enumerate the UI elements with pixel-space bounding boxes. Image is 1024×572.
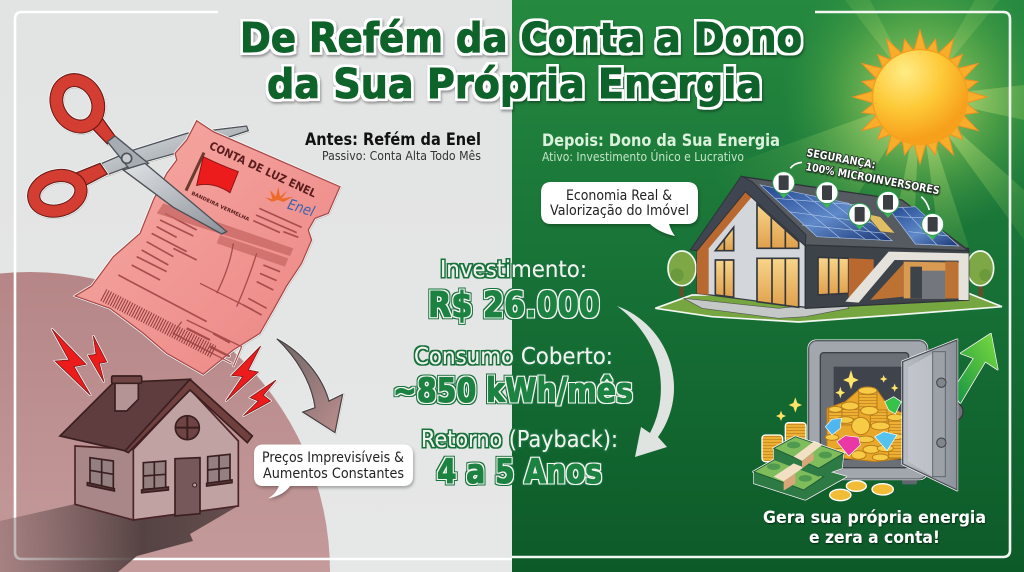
house front wall <box>133 389 238 520</box>
bill text lines <box>118 208 302 322</box>
gable wood panel <box>697 192 752 295</box>
icon: red lightning bolts <box>52 329 276 416</box>
small pointer arrows <box>790 162 929 210</box>
safe interior <box>820 353 909 468</box>
front roof trim <box>690 176 806 251</box>
bill flag caption: BANDEIRA VERMELHA <box>190 191 250 223</box>
Enel logo <box>265 187 317 221</box>
closing statement: Gera sua própria energia <box>763 508 986 528</box>
right tree <box>967 251 994 297</box>
white diagonal entrance frame <box>845 252 969 303</box>
right frame outline <box>512 12 1010 557</box>
maroon semicircle behind the house <box>0 272 330 572</box>
stat: investimento: Investimento: <box>440 257 587 283</box>
callout: economia real <box>541 182 698 236</box>
icon: scissors cutting the bill <box>30 73 340 374</box>
house side wall <box>75 446 133 520</box>
solar panels left <box>760 185 892 241</box>
bill table header bands <box>157 203 293 256</box>
solar panels right <box>889 207 959 246</box>
metal roof <box>742 177 969 251</box>
safe feet <box>902 475 917 484</box>
house door <box>175 458 200 516</box>
loose coins <box>830 481 893 501</box>
heading: antes: Antes: Refém da Enel <box>305 130 481 150</box>
house windows <box>87 454 232 493</box>
stat: retorno payback: 4 a 5 Anos <box>437 452 602 492</box>
bill heading: CONTA DE LUZ ENEL <box>207 138 319 200</box>
bill: conta de luz <box>75 121 340 374</box>
closing statement: e zera a conta! <box>809 528 940 548</box>
scissors front joint <box>107 136 148 172</box>
stat: consumo coberto <box>393 344 633 411</box>
bill barcode <box>103 295 213 352</box>
green up arrow <box>952 333 998 403</box>
heading: depois: Ativo: Investimento Único e Lucrativo <box>542 149 744 164</box>
house gable trim <box>125 379 252 453</box>
label: segurança microinversores: SEGURANÇA: <box>805 146 877 171</box>
curved white arrow <box>617 306 674 457</box>
safe body <box>809 341 927 479</box>
closing statement <box>763 508 986 548</box>
scissors front blade <box>123 163 227 234</box>
icon: house under red lightning <box>60 376 252 520</box>
title: da Sua Própria Energia <box>267 60 762 108</box>
safe hinges <box>937 378 946 447</box>
heading: depois <box>542 131 780 164</box>
icon: gray downward arrow <box>277 339 343 433</box>
icon: safe full of coins and money <box>754 333 998 501</box>
heading: antes <box>305 130 481 163</box>
callout: economia real: Economia Real & <box>566 188 672 204</box>
gold pile <box>825 387 903 462</box>
callout: preços imprevisíveis: Preços Imprevisíveis & <box>262 450 404 466</box>
bill total lines <box>187 328 230 357</box>
sparkles <box>776 370 898 421</box>
gable windows <box>715 204 799 307</box>
roof skylight <box>865 213 895 233</box>
money stacks <box>754 437 847 500</box>
lower windows <box>818 257 849 295</box>
callout: preços imprevisíveis: Aumentos Constantes <box>263 466 404 482</box>
bill red flag <box>186 153 238 193</box>
left frame outline <box>15 12 512 559</box>
sun disk <box>872 50 968 144</box>
sun rays <box>853 30 987 164</box>
microinverter badges <box>773 172 944 240</box>
label: segurança microinversores <box>804 146 941 197</box>
Enel logo: Enel <box>285 196 317 221</box>
stat: investimento <box>428 257 600 326</box>
stat: retorno payback: Retorno (Payback): <box>421 427 618 453</box>
bill table grid <box>173 243 257 367</box>
stat: consumo coberto: Consumo Coberto: <box>414 344 613 370</box>
heading: depois: Depois: Dono da Sua Energia <box>542 131 780 151</box>
house shadow <box>0 504 238 572</box>
gems <box>825 397 901 456</box>
left background panel <box>0 0 512 572</box>
coin stacks <box>762 423 806 462</box>
icon: sun <box>853 30 987 164</box>
stat: consumo coberto: ~850 kWh/mês <box>393 371 633 411</box>
stat: investimento: R$ 26.000 <box>428 285 600 326</box>
entrance wood section <box>870 263 904 300</box>
safe wheel <box>944 402 963 421</box>
safe open door <box>903 340 957 490</box>
scissors rear blade <box>102 126 248 175</box>
house round window <box>175 416 199 440</box>
house main roof <box>60 379 190 451</box>
main gable wall <box>697 192 805 307</box>
wood cladding <box>849 258 874 298</box>
heading: antes: Passivo: Conta Alta Todo Mês <box>322 149 481 163</box>
house steps <box>684 298 849 318</box>
ground <box>655 293 1002 322</box>
stat: retorno payback <box>421 427 618 492</box>
left tree <box>668 251 696 297</box>
label: segurança microinversores: 100% MICROINVERSORES <box>804 160 941 197</box>
right section wall <box>805 243 969 308</box>
callout: preços imprevisíveis <box>254 444 413 498</box>
icon: modern house with solar panels <box>655 162 1002 322</box>
callout: economia real: Valorização do Imóvel <box>550 203 689 219</box>
scissors red handles <box>30 73 115 216</box>
title <box>240 14 802 108</box>
house chimney <box>112 376 142 411</box>
title: De Refém da Conta a Dono <box>240 14 802 62</box>
scissors pivot <box>122 153 132 163</box>
right background panel <box>512 0 1024 572</box>
sun glow and light beams <box>710 0 1024 322</box>
